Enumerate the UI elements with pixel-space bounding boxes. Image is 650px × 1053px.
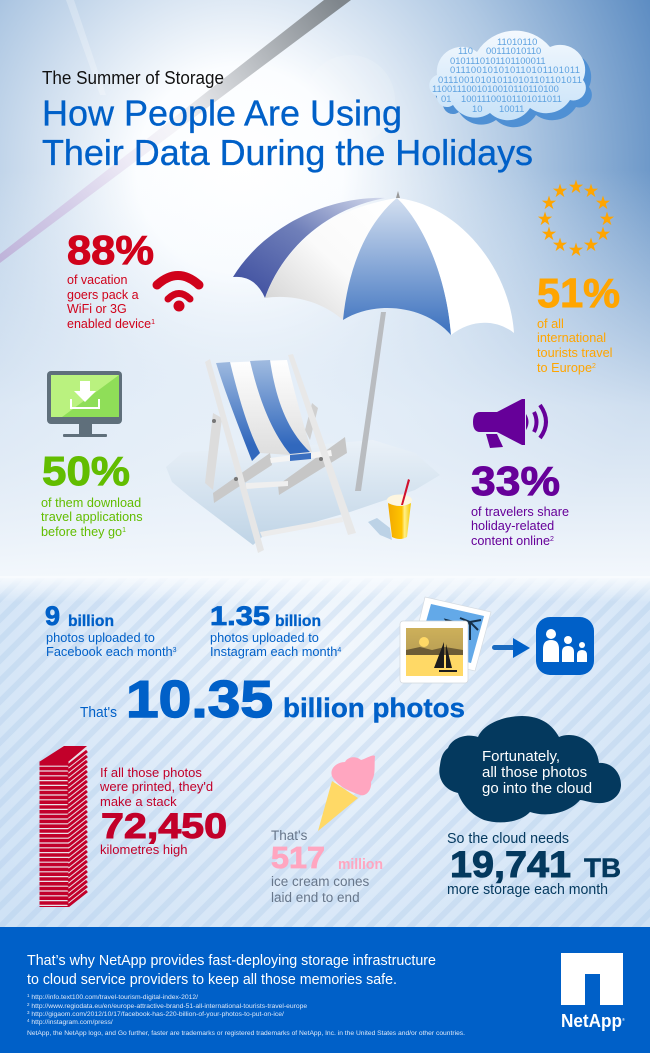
icon: ice cream cone	[318, 756, 375, 831]
title: Their Data During the Holidays	[42, 132, 533, 173]
striped lower background	[0, 576, 650, 928]
stat: 88%: enabled device	[67, 317, 151, 331]
stat: 51%: international	[537, 331, 606, 345]
binary cloud	[429, 31, 592, 127]
footer message	[27, 952, 436, 988]
stat: 51%: 2	[592, 363, 596, 370]
stat: 72,450: 72,450	[101, 807, 227, 846]
stat: 9 billion: Facebook each month	[46, 644, 173, 659]
footer panel	[0, 927, 650, 1053]
umbrella pole	[355, 312, 386, 491]
total photos	[80, 671, 465, 729]
binary digits: 10	[472, 103, 482, 114]
chair fabric	[216, 360, 312, 461]
stat: 88%: 1	[151, 319, 155, 326]
NetApp logo	[561, 953, 625, 1031]
stat: 88%: 88%	[67, 227, 154, 273]
binary digits: 00111010110	[486, 45, 541, 56]
icon: photo stack	[39, 746, 87, 907]
stat: 9 billion: photos uploaded to	[46, 630, 155, 645]
stat: 72,450	[99, 765, 227, 857]
stat: 9 billion: 9	[45, 601, 60, 631]
stat: 72,450: kilometres high	[100, 842, 187, 857]
icon: wifi	[157, 276, 199, 312]
icon: download monitor	[47, 371, 122, 437]
stat: 72,450: make a stack	[100, 794, 177, 809]
title: How People Are Using	[42, 92, 402, 134]
footnotes	[27, 993, 465, 1037]
stat: 9 billion: 3	[173, 647, 177, 654]
NetApp logo: NetApp	[561, 1011, 622, 1031]
stat: 72,450: were printed, they'd	[99, 779, 213, 794]
icon: people	[536, 617, 594, 675]
stat: 50%: 1	[122, 527, 126, 534]
stat: 51%: of all	[537, 317, 564, 331]
binary digits: 11010110	[497, 36, 537, 47]
arrow	[492, 638, 530, 658]
icon: megaphone	[473, 399, 546, 448]
binary digits: 0101110101101100011	[450, 55, 546, 66]
footer message: That’s why NetApp provides fast-deploying storage infrastructure	[27, 952, 436, 969]
stat: 19,741 TB: 19,741	[450, 844, 571, 885]
stat: 50%: of them download	[41, 496, 141, 510]
icon: ring of stars	[538, 180, 614, 256]
stat: 33%: holiday-related	[471, 519, 554, 533]
footnotes: http://gigaom.com/2012/10/17/facebook-has-220-billion-of-your-photos-to-put-on-ice/	[30, 1011, 284, 1018]
beach shadow	[166, 440, 440, 545]
title	[42, 68, 533, 173]
footnotes: http://info.text100.com/travel-tourism-digital-index-2012/	[30, 994, 198, 1001]
stat: 88%: goers pack a	[67, 288, 139, 302]
sky background	[0, 0, 650, 600]
icon: photos	[400, 597, 491, 683]
stat: 1.35 billion: 4	[337, 647, 341, 654]
binary digits: 1100111001010010110110100	[432, 83, 559, 94]
total photos: billion photos	[283, 693, 465, 723]
stat: 33%: of travelers share	[471, 505, 569, 519]
stat: 517 million: laid end to end	[271, 890, 360, 905]
stat: 33%: content online	[471, 534, 550, 548]
footnotes: 2	[27, 1002, 30, 1007]
stat: 1.35 billion: photos uploaded to	[210, 630, 319, 645]
total photos: 10.35	[126, 671, 273, 729]
stat: 33%: 33%	[471, 458, 560, 504]
beach umbrella	[233, 191, 514, 491]
stat: 1.35 billion: billion	[275, 613, 321, 630]
stat: 72,450: If all those photos	[100, 765, 202, 780]
stat: 517 million: That's	[271, 828, 308, 843]
stat: 50%	[41, 448, 143, 539]
stat: 88%	[67, 227, 155, 331]
stat: 517 million	[271, 828, 383, 905]
deck chair	[205, 354, 356, 553]
stat: 50%: 50%	[42, 448, 130, 494]
stat: 51%: to Europe	[537, 361, 592, 375]
stat: 517 million: ice cream cones	[271, 874, 370, 889]
binary digits: 10011100101101011011	[461, 93, 562, 104]
footnotes: http://www.regiodata.eu/en/europe-attractive-brand-51-all-international-tourists-travel-europe	[30, 1003, 307, 1010]
stat: 9 billion	[45, 601, 177, 659]
footnotes: http://instagram.com/press/	[30, 1019, 113, 1026]
dark cloud callout: go into the cloud	[482, 780, 592, 797]
binary digits: 011100101010110101101011	[450, 64, 580, 75]
stat: 19,741 TB: TB	[584, 853, 621, 883]
stat: 1.35 billion	[210, 601, 341, 659]
stat: 517 million: million	[338, 857, 383, 873]
dark cloud callout: Fortunately,	[482, 748, 560, 765]
stat: 51%: tourists travel	[537, 346, 612, 360]
stat: 19,741 TB	[447, 830, 621, 898]
stat: 88%: of vacation	[67, 273, 128, 287]
stat: 9 billion: billion	[68, 613, 114, 630]
stat: 88%: WiFi or 3G	[67, 302, 127, 316]
title: The Summer of Storage	[42, 68, 224, 88]
stat: 33%: 2	[550, 536, 554, 543]
NetApp logo: ®	[622, 1017, 625, 1022]
stat: 51%: 51%	[537, 270, 620, 316]
juice glass	[368, 479, 412, 540]
footnotes: 1	[27, 993, 30, 998]
binary digits: 011100101010110101101101011	[438, 74, 582, 85]
footnotes: 4	[27, 1018, 30, 1023]
stat: 50%: before they go	[41, 525, 122, 539]
dark cloud callout: all those photos	[482, 764, 587, 781]
binary digits	[432, 36, 582, 114]
stat: 33%	[471, 458, 569, 548]
stat: 517 million: 517	[271, 840, 325, 875]
total photos: That's	[80, 704, 117, 721]
binary digits: 01	[441, 93, 451, 104]
stat: 1.35 billion: 1.35	[210, 601, 270, 631]
footnotes: NetApp, the NetApp logo, and Go further, faster are trademarks or registered trademarks of NetApp, Inc. in the United States and/or other countries.	[27, 1030, 465, 1037]
binary digits: 110	[458, 45, 473, 56]
footer message: to cloud service providers to keep all those memories safe.	[27, 971, 397, 988]
stat: 19,741 TB: So the cloud needs	[447, 830, 569, 847]
stat: 19,741 TB: more storage each month	[447, 881, 608, 898]
stat: 50%: travel applications	[41, 510, 143, 524]
footnotes: 3	[27, 1010, 30, 1015]
dark cloud callout	[439, 716, 621, 822]
stat: 1.35 billion: Instagram each month	[210, 644, 337, 659]
stat: 51%	[537, 270, 620, 375]
binary digits: 10011	[499, 103, 524, 114]
